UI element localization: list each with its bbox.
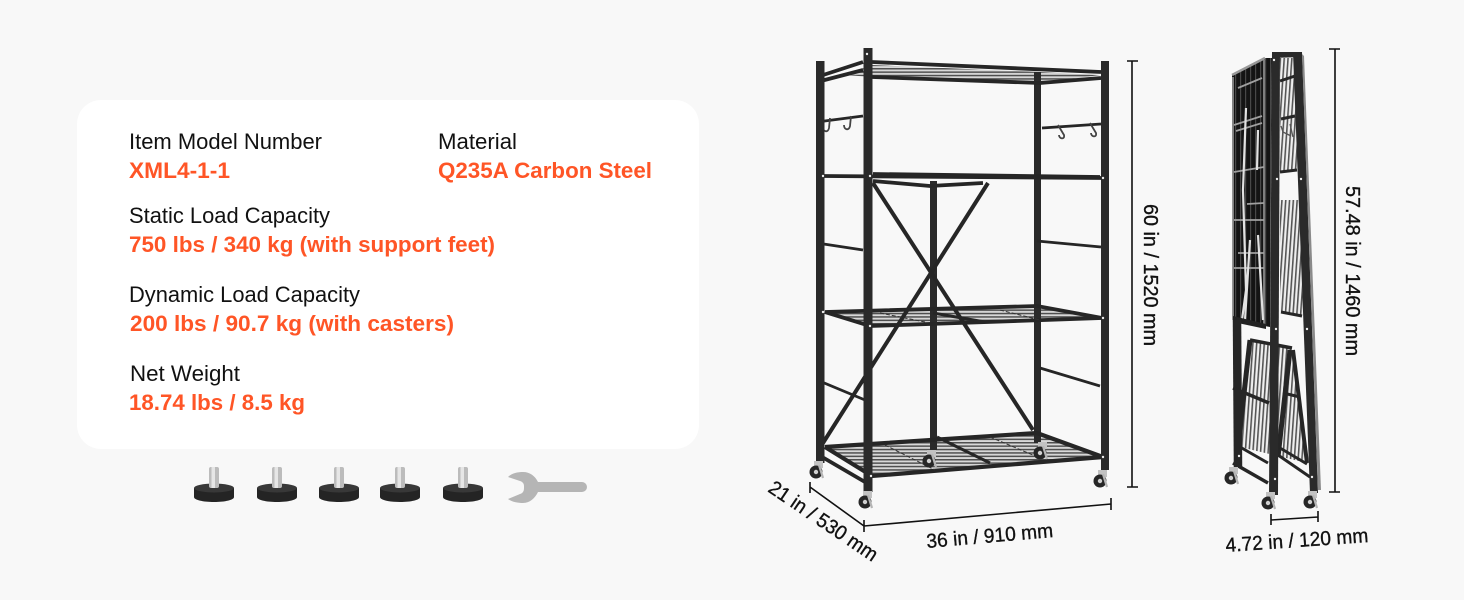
- spec: material: [438, 129, 652, 183]
- spec: dynamic load capacity: [129, 282, 454, 336]
- spec: dynamic load capacity: 200 lbs / 90.7 kg (with casters): [130, 311, 454, 336]
- dimension: folded height 57.48 in: 57.48 in / 1460 mm: [1341, 186, 1363, 356]
- dimension: width 36 in: 36 in / 910 mm: [926, 520, 1054, 553]
- folded post edge highlight: [1302, 54, 1321, 490]
- side bars: [817, 116, 1101, 482]
- folded rack rivets: [1238, 59, 1313, 480]
- icon: support foot 2: [257, 467, 297, 502]
- spec: net weight: [129, 361, 305, 415]
- spec: dynamic load capacity: Dynamic Load Capacity: [129, 282, 361, 307]
- icon: support foot 4: [380, 467, 420, 502]
- panel: specifications: [77, 100, 699, 449]
- spec: material: Material: [438, 129, 517, 154]
- lower folded shelf: [1240, 340, 1307, 463]
- third mesh shelf: [825, 306, 1102, 326]
- spec: net weight: 18.74 lbs / 8.5 kg: [129, 390, 305, 415]
- folded shelf panel: [1232, 58, 1272, 329]
- dimension: folded height 57.48 in: [1329, 49, 1363, 492]
- product: folded shelf rack: [1224, 52, 1321, 510]
- cross braces: [823, 183, 1033, 443]
- dimension: folded width 4.72 in: [1225, 511, 1369, 557]
- bottom mesh shelf: [825, 433, 1103, 476]
- dimension: height 60 in: [1127, 61, 1161, 487]
- icon: wrench: [508, 472, 587, 503]
- icon: support foot 3: [319, 467, 359, 502]
- dimension: height 60 in: 60 in / 1520 mm: [1139, 204, 1161, 346]
- dimension: width 36 in: [864, 498, 1111, 553]
- lower legs and rails: [1233, 76, 1310, 483]
- dimension: folded width 4.72 in: 4.72 in / 120 mm: [1225, 525, 1369, 557]
- spec: static load capacity: 750 lbs / 340 kg (with support feet): [129, 232, 495, 257]
- icon: support foot 1: [194, 467, 234, 502]
- spec: item model number: XML4-1-1: [129, 158, 230, 183]
- spec: static load capacity: [129, 203, 495, 257]
- post rivets: [822, 53, 1104, 477]
- hanging hooks: [823, 116, 1096, 138]
- spec: net weight: Net Weight: [130, 361, 241, 386]
- dimension: depth 21 in: 21 in / 530 mm: [764, 477, 882, 566]
- spec: material: Q235A Carbon Steel: [438, 158, 652, 183]
- main folded posts: [1269, 52, 1318, 495]
- spec: item model number: Item Model Number: [129, 129, 322, 154]
- folded rack casters: [1224, 467, 1317, 510]
- spec: static load capacity: Static Load Capacity: [129, 203, 331, 228]
- front posts: [816, 48, 1109, 492]
- accessories: support feet and wrench: [194, 467, 587, 503]
- middle wire section: [1280, 200, 1303, 316]
- shelf frames: [817, 62, 1103, 476]
- folded rack hooks: [1281, 124, 1293, 137]
- spec: item model number: [129, 129, 322, 183]
- top mesh shelf: [845, 65, 1100, 83]
- upper wire section: [1280, 58, 1298, 172]
- icon: support foot 5: [443, 467, 483, 502]
- casters: [810, 442, 1107, 508]
- product: assembled shelf rack: [810, 48, 1109, 508]
- rear posts: [930, 72, 1041, 450]
